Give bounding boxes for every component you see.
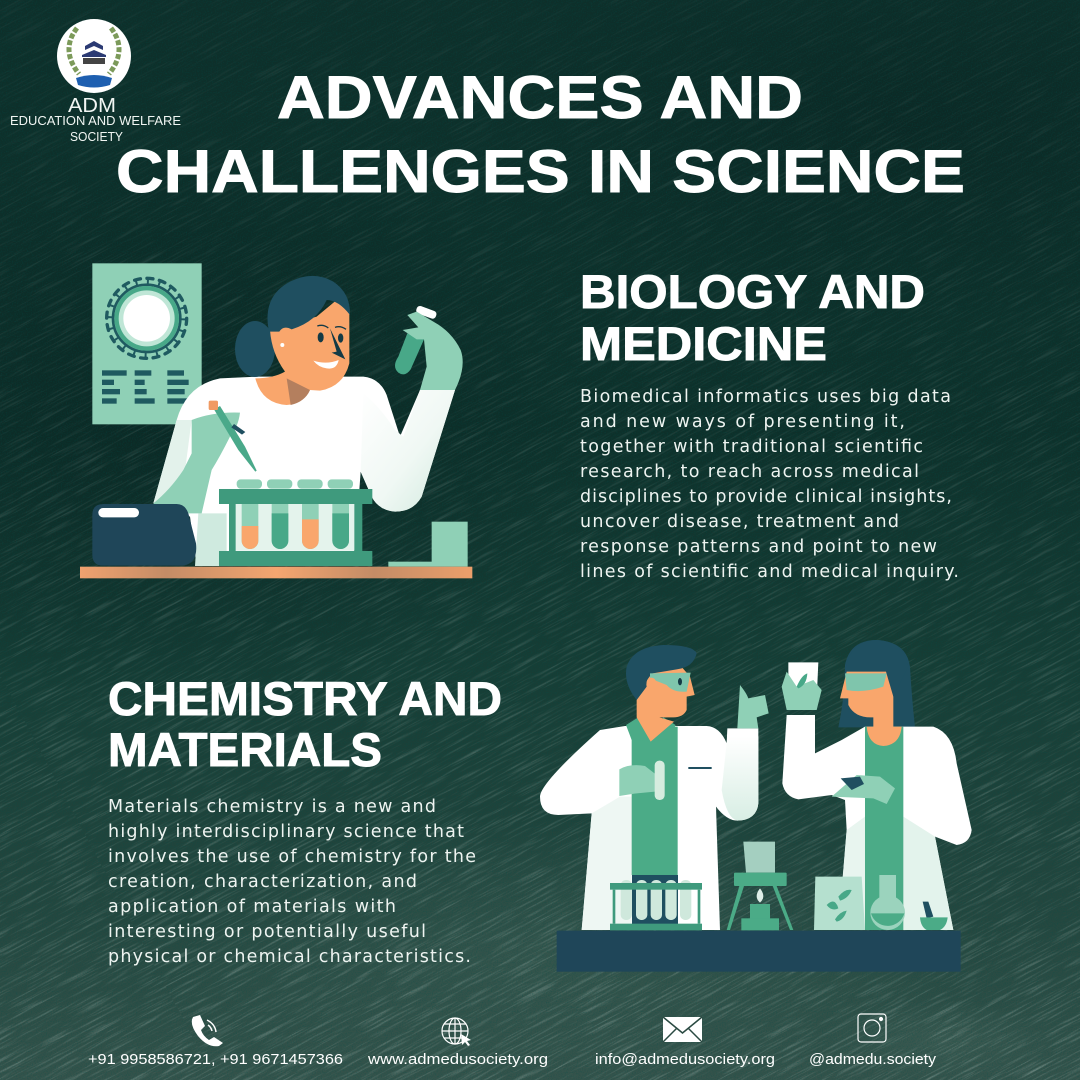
icon: envelope	[663, 1017, 702, 1042]
round flask	[870, 875, 905, 930]
female scientist	[782, 640, 972, 930]
illustration: scientist with test tube and pipette	[80, 263, 472, 578]
organisation subtitle line 1: EDUCATION AND WELFARE	[10, 113, 181, 128]
text block: biology and medicine: uncover disease, treatment and	[580, 512, 899, 532]
test tube rack	[610, 875, 702, 930]
organisation subtitle line 2: SOCIETY	[70, 129, 123, 144]
illustration: two scientists at a lab bench	[540, 640, 972, 972]
face and neck	[255, 300, 349, 405]
text block: biology and medicine: and new ways of presenting it,	[580, 412, 905, 432]
footer: contact details	[88, 1014, 937, 1068]
heading: biology and medicine	[580, 265, 925, 370]
text block: chemistry and materials: highly interdisciplinary science that	[108, 822, 464, 842]
burner with beaker	[727, 842, 793, 930]
green shirt	[632, 727, 678, 875]
heading: chemistry and materials: CHEMISTRY AND	[108, 672, 502, 725]
facial features	[280, 325, 346, 369]
icon: instagram	[858, 1014, 886, 1042]
mortar and pestle	[920, 902, 948, 930]
text block: chemistry and materials: Materials chemistry is a new and	[108, 797, 436, 817]
website: www.admedusociety.org	[367, 1051, 548, 1068]
right glove holding test tube	[395, 305, 463, 390]
logo: ADM Education and Welfare Society	[10, 19, 181, 144]
organisation name: ADM	[68, 95, 116, 117]
lab bench	[80, 567, 472, 578]
hair	[267, 276, 350, 332]
text block: biology and medicine: response patterns and point to new	[580, 537, 937, 557]
hand with beaker	[782, 662, 822, 710]
icon: globe with cursor	[442, 1018, 471, 1046]
icon: logo badge	[57, 19, 131, 93]
title: ADVANCES AND	[277, 64, 803, 131]
goggles	[650, 673, 691, 692]
text block: biology and medicine: lines of scientific and medical inquiry.	[580, 562, 959, 582]
hair front	[845, 640, 908, 697]
heading: chemistry and materials	[108, 672, 502, 776]
hair bun	[235, 321, 275, 377]
text block: chemistry and materials: physical or chemical characteristics.	[108, 947, 471, 967]
heading: biology and medicine: BIOLOGY AND	[580, 265, 925, 318]
text block: biology and medicine	[580, 387, 959, 582]
text block: biology and medicine: together with traditional scientific	[580, 437, 923, 457]
scientist figure	[153, 276, 463, 566]
title	[116, 64, 965, 205]
text block: chemistry and materials: application of materials with	[108, 897, 396, 917]
lab bench	[557, 931, 961, 972]
left glove and pipette	[153, 401, 257, 513]
leaf jar	[814, 877, 865, 930]
hand holding sample	[832, 775, 895, 804]
thumbs-up hand	[737, 685, 769, 728]
text block: chemistry and materials: interesting or potentially useful	[108, 922, 426, 942]
coat and arms	[782, 715, 972, 930]
green shirt	[865, 727, 903, 930]
hair	[626, 645, 697, 700]
text block: chemistry and materials	[108, 797, 476, 967]
hand with test tube	[619, 765, 657, 796]
text block: biology and medicine: research, to reach across medical	[580, 462, 919, 482]
beaker	[388, 522, 468, 567]
pocket	[688, 767, 712, 769]
text block: chemistry and materials: creation, characterization, and	[108, 872, 417, 892]
heading: chemistry and materials: MATERIALS	[108, 723, 382, 776]
neck and face	[637, 665, 695, 742]
text block: chemistry and materials: involves the use of chemistry for the	[108, 847, 476, 867]
hair	[838, 640, 915, 727]
lab coat body	[153, 377, 455, 566]
dark lab device	[92, 504, 196, 566]
test tube rack	[219, 479, 372, 566]
neck and face	[840, 663, 902, 746]
text block: biology and medicine: Biomedical informatics uses big data	[580, 387, 951, 407]
goggles	[845, 673, 887, 691]
phone numbers: +91 9958586721, +91 9671457366	[88, 1051, 343, 1068]
poster with virus	[92, 263, 202, 424]
icon: phone	[192, 1015, 223, 1046]
male scientist	[540, 645, 769, 930]
instagram handle: @admedu.society	[809, 1051, 937, 1068]
email: info@admedusociety.org	[595, 1051, 775, 1068]
coat and arms	[540, 726, 758, 930]
heading: biology and medicine: MEDICINE	[580, 317, 827, 370]
text block: biology and medicine: disciplines to provide clinical insights,	[580, 487, 952, 507]
title: CHALLENGES IN SCIENCE	[116, 138, 965, 205]
